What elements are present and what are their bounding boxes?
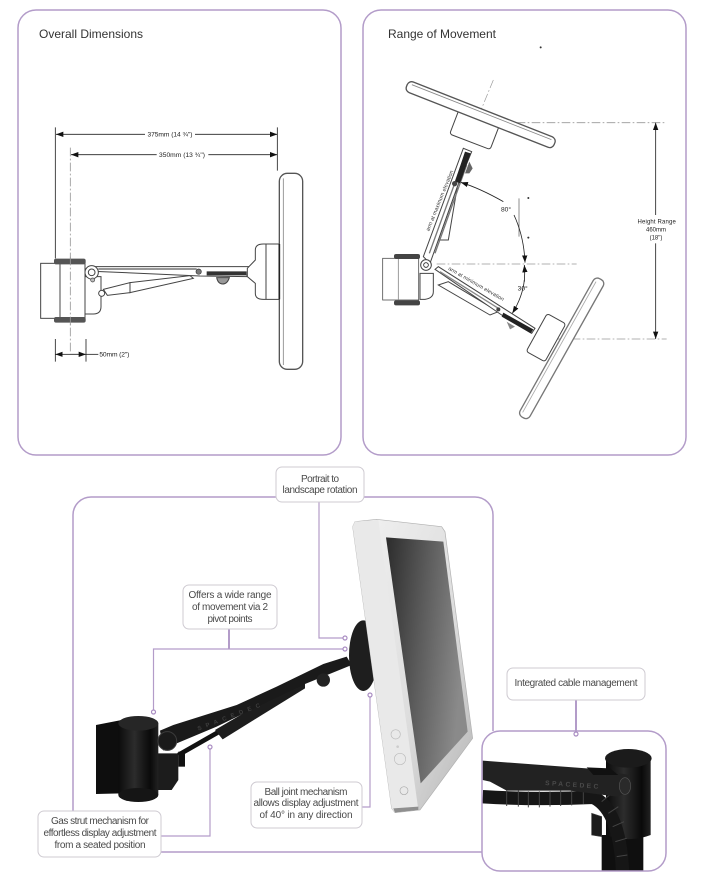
callout: integrated cable management: Integrated cable management bbox=[514, 678, 638, 689]
height range arrow bbox=[637, 123, 676, 339]
callout: ball joint: of 40° in any direction bbox=[260, 810, 352, 821]
callout: ball joint: allows display adjustment bbox=[254, 798, 359, 809]
callout: gas strut: effortless display adjustment bbox=[44, 828, 157, 839]
leader: pivot points bbox=[152, 629, 347, 714]
ball joint disc bbox=[349, 620, 378, 691]
gas strut photo bbox=[178, 683, 305, 767]
callout: range of movement: of movement via 2 bbox=[192, 602, 268, 613]
panel: range of movement bbox=[363, 10, 686, 455]
cable wrap bbox=[482, 790, 628, 858]
heading: overall dimensions: Overall Dimensions bbox=[39, 27, 143, 41]
upper arm position: arm at maximum elevation bbox=[425, 170, 455, 232]
monitor photo bbox=[353, 519, 473, 813]
callout: gas strut: from a seated position bbox=[54, 840, 146, 851]
lower arm position: arm at minimum elevation bbox=[447, 266, 505, 303]
monitor profile bbox=[279, 173, 303, 369]
callout: portrait to landscape: landscape rotation bbox=[282, 485, 358, 496]
arm: SPACEDEC bbox=[545, 780, 599, 791]
height range arrow: (18") bbox=[650, 235, 662, 241]
callout: range of movement: Offers a wide range bbox=[188, 590, 272, 601]
upper monitor position bbox=[405, 80, 557, 149]
wall base bbox=[383, 254, 433, 305]
leader: ball joint bbox=[362, 693, 372, 807]
callout: range of movement: pivot points bbox=[208, 614, 252, 625]
arm bbox=[483, 761, 631, 797]
callout: portrait to landscape: Portrait to bbox=[301, 474, 339, 485]
callout: ball joint: Ball joint mechanism bbox=[264, 787, 348, 798]
leader: gas strut bbox=[161, 745, 212, 836]
dimension: 350mm: 350mm (13 ¾") bbox=[159, 152, 205, 159]
angle arcs: 30° bbox=[518, 285, 528, 293]
panel: overall dimensions bbox=[18, 10, 341, 455]
detail photo bbox=[483, 749, 652, 873]
callout: integrated cable management bbox=[507, 668, 645, 700]
height range arrow: Height Range bbox=[637, 220, 676, 226]
dimension: 50mm: 50mm (2") bbox=[99, 351, 129, 358]
dimension: 375mm bbox=[55, 127, 277, 258]
callout: gas strut bbox=[38, 811, 161, 857]
diagram: overall dimensions side view bbox=[41, 127, 303, 369]
height range arrow: 460mm bbox=[646, 228, 666, 234]
photo: monitor on arm bbox=[96, 519, 473, 813]
upper arm position bbox=[423, 148, 473, 263]
heading: range of movement: Range of Movement bbox=[388, 27, 497, 41]
arm and gas strut bbox=[85, 266, 250, 296]
callout: gas strut: Gas strut mechanism for bbox=[51, 816, 150, 827]
angle arcs: 80° bbox=[501, 206, 511, 214]
lower arm position bbox=[435, 266, 535, 333]
callout: range of movement bbox=[183, 585, 277, 629]
panel: cable management border bbox=[482, 731, 666, 871]
diagram: range of movement bbox=[383, 46, 676, 420]
wall base photo bbox=[96, 716, 178, 802]
angle arcs bbox=[461, 182, 528, 313]
arm photo bbox=[158, 657, 352, 751]
dimension: 50mm bbox=[55, 339, 129, 362]
wall base bbox=[41, 257, 101, 327]
mount bbox=[247, 244, 279, 299]
lower mount bbox=[526, 314, 566, 362]
lower monitor position bbox=[518, 276, 605, 420]
reference lines bbox=[437, 46, 667, 339]
post bbox=[602, 749, 652, 873]
dimension: 375mm: 375mm (14 ¾") bbox=[147, 132, 192, 139]
upper mount bbox=[450, 109, 500, 150]
panel: product photo frame bbox=[73, 497, 493, 852]
callout: ball joint bbox=[251, 782, 362, 828]
panel: cable management detail bbox=[483, 749, 652, 873]
callout: portrait to landscape bbox=[276, 467, 364, 502]
leader: cable management bbox=[574, 700, 578, 736]
arm photo: SPACEDEC bbox=[197, 703, 262, 733]
leader: portrait rotation bbox=[319, 502, 347, 640]
